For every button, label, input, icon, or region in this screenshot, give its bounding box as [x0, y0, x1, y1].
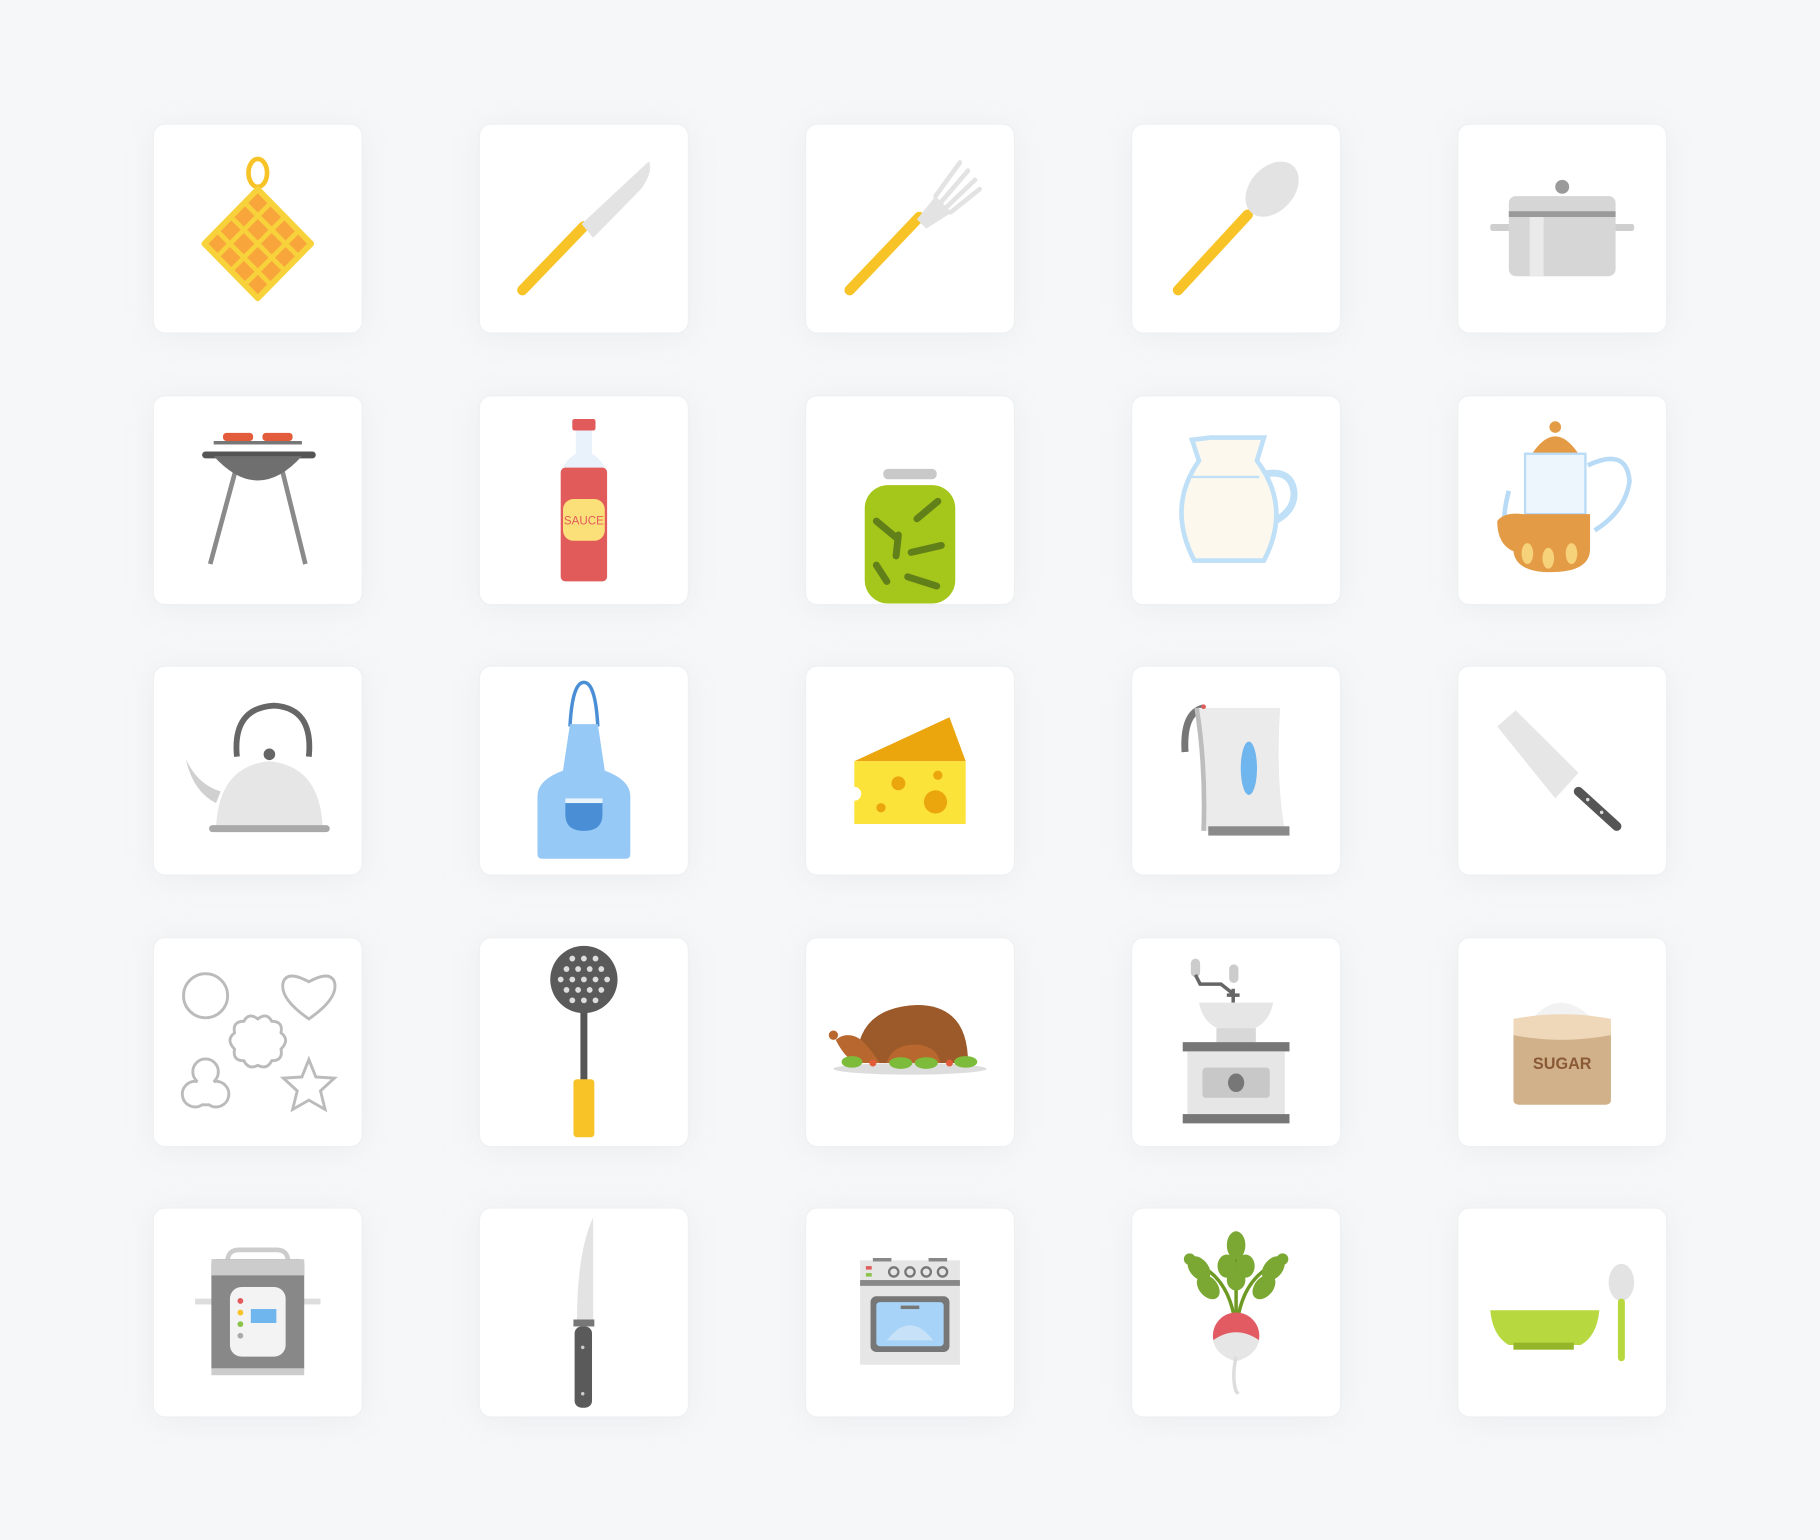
- card: sauce: [479, 396, 688, 605]
- card: skimmer: [479, 938, 688, 1147]
- card: bowl and spoon: [1458, 1208, 1667, 1417]
- card: teapot: [1458, 396, 1667, 605]
- card: knife: [479, 124, 688, 333]
- card: jug: [1132, 396, 1341, 605]
- card: cheese: [806, 666, 1014, 875]
- card: cleaver: [1458, 666, 1667, 875]
- card: electric kettle: [1132, 666, 1341, 875]
- card: grill: [153, 396, 362, 605]
- card: pot: [1458, 124, 1667, 333]
- card: sugar bag: SUGAR: [1533, 1055, 1592, 1073]
- card: chef knife: [479, 1208, 688, 1417]
- card: pressure cooker: [153, 1208, 362, 1417]
- card: fork: [806, 124, 1014, 333]
- card: oven: [806, 1208, 1014, 1417]
- card: apron: [479, 666, 688, 875]
- card: kettle: [153, 666, 362, 875]
- card: cookie cutters: [153, 938, 362, 1147]
- card: spoon: [1132, 124, 1341, 333]
- card: pickle jar: [806, 396, 1014, 605]
- card: coffee grinder: [1132, 938, 1341, 1147]
- card: radish: [1132, 1208, 1341, 1417]
- card: roast turkey: [806, 938, 1014, 1147]
- card shadows: [153, 128, 1667, 1420]
- card: sugar bag: [1458, 938, 1667, 1147]
- card: potholder: [153, 124, 362, 333]
- card: sauce: SAUCE: [564, 515, 604, 528]
